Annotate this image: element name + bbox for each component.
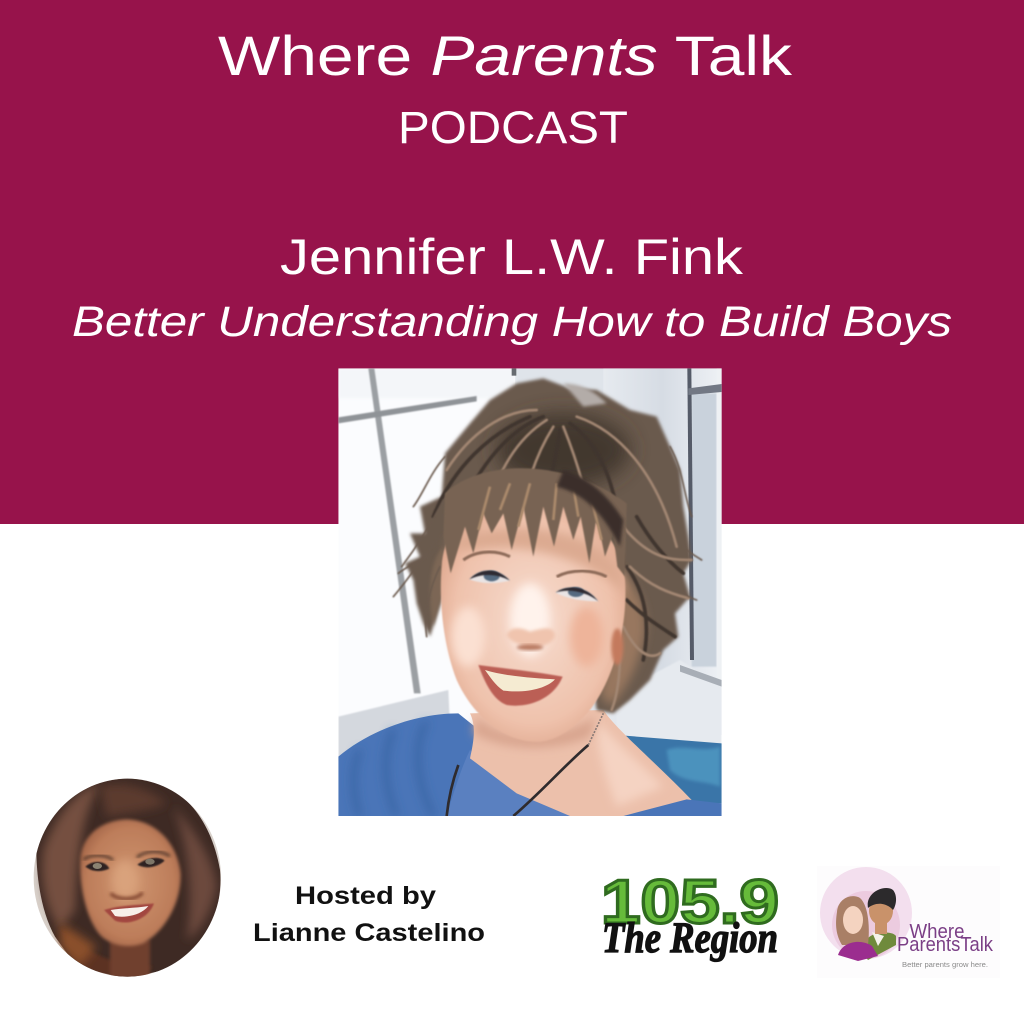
logo numerals: 105.9: [601, 868, 779, 937]
logo box: [817, 866, 1000, 978]
host face: [80, 819, 181, 946]
guest name: Jennifer L.W. Fink: [280, 229, 744, 285]
guest photo: [338, 368, 722, 816]
face: [441, 500, 625, 742]
header band: [0, 0, 1024, 524]
logo figure: woman: [836, 896, 878, 961]
eyebrows and eyes: [463, 552, 510, 560]
neck: [110, 940, 150, 978]
logo: 105.9 The Region: [601, 868, 779, 962]
logo tagline: Better parents grow here.: [902, 962, 988, 969]
logo figure: man: [860, 888, 896, 960]
host label: Hosted by: [295, 882, 436, 910]
host credit: [253, 882, 485, 947]
logo circle: [820, 867, 912, 959]
logo: Where Parents Talk: ParentsTalk: [897, 934, 994, 956]
mouth: [478, 665, 563, 706]
logo: Where Parents Talk: [817, 866, 1000, 978]
logo script: The Region: [602, 915, 778, 962]
logo wordmark: Where: [910, 921, 964, 943]
nose: [507, 628, 555, 647]
host portrait: [33, 778, 222, 978]
hair back: [405, 378, 692, 713]
host name: Lianne Castelino: [253, 919, 485, 947]
hair strands: [393, 410, 702, 710]
episode title: Better Understanding How to Build Boys: [72, 298, 952, 346]
title: Where Parents Talk: Where Parents Talk: [218, 24, 793, 87]
subtitle: PODCAST: PODCAST: [398, 102, 628, 153]
hair bangs: [443, 468, 627, 577]
